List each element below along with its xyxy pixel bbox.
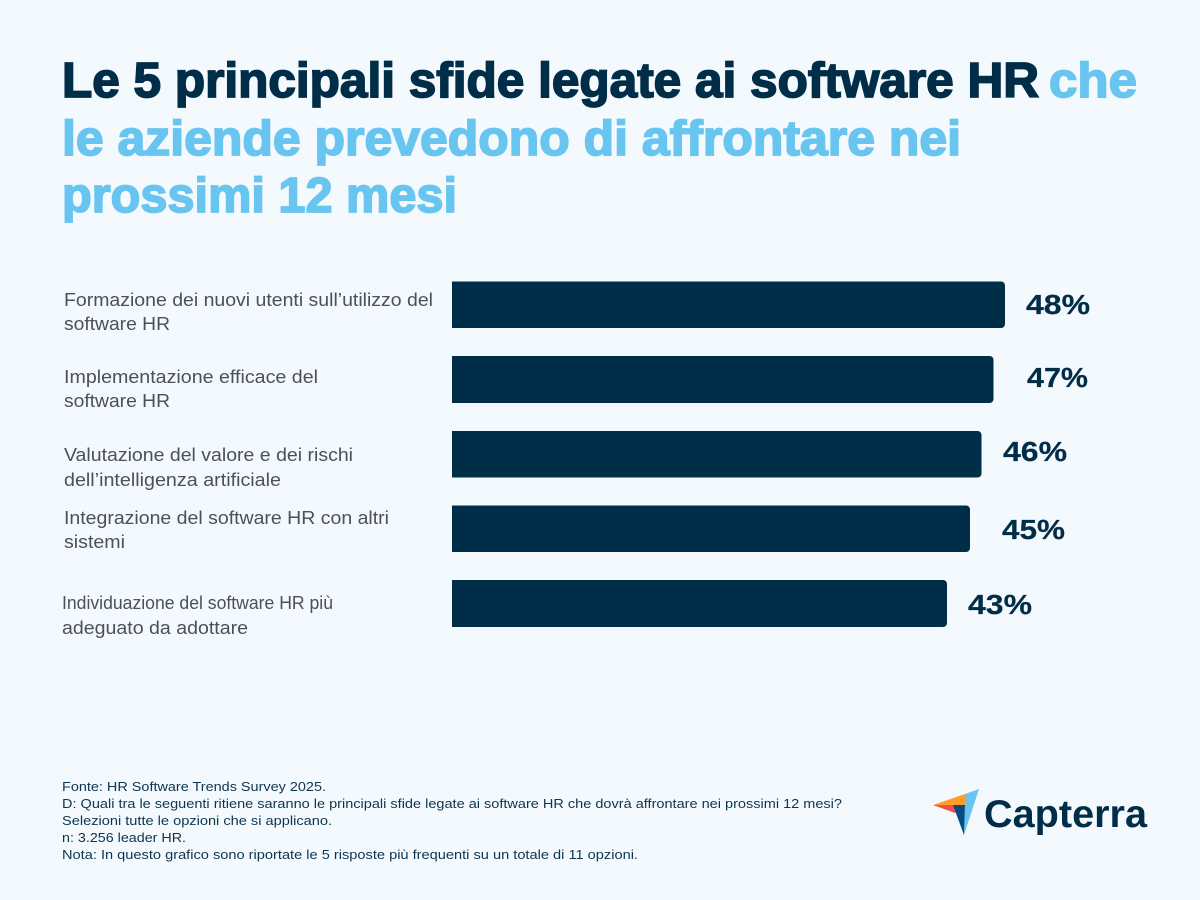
row 4: Integrazione 45%: [64, 506, 1065, 552]
icon: Capterra arrow: [933, 789, 979, 835]
row 2: Implementazione 47%: software HR: [64, 391, 170, 411]
source notes: Fonte: HR Software Trends Survey 2025.: [62, 779, 326, 794]
row 4: Integrazione 45%: 45%: [1002, 514, 1065, 545]
row 2: Implementazione 47%: Implementazione efficace del: [64, 367, 318, 387]
row 3: Valutazione 46%: [64, 431, 1067, 490]
logo: Capterra: [933, 789, 1147, 836]
row 3: Valutazione 46%: dell’intelligenza artificiale: [64, 470, 281, 490]
row 5: Individuazione 43%: [62, 580, 1032, 638]
row 1: Formazione 48%: 48%: [1026, 289, 1090, 320]
title: le aziende prevedono di affrontare nei: [62, 112, 961, 166]
row 1: Formazione 48%: software HR: [64, 314, 170, 334]
row 4: Integrazione 45%: sistemi: [64, 532, 125, 552]
row 2: Implementazione 47%: 47%: [1027, 362, 1088, 393]
title: Le 5 principali sfide legate ai software HR: [62, 54, 1039, 108]
row 4: Integrazione 45%: Integrazione del software HR con altri: [64, 508, 389, 528]
row 5: Individuazione 43%: 43%: [968, 589, 1032, 620]
source notes: Selezioni tutte le opzioni che si applicano.: [62, 813, 332, 828]
row 1: Formazione 48%: Formazione dei nuovi utenti sull’utilizzo del: [64, 290, 433, 310]
bar chart: [62, 282, 1090, 638]
row 1: Formazione 48%: [64, 282, 1090, 334]
title: [62, 54, 1137, 223]
row 3: Valutazione 46%: 46%: [1003, 436, 1067, 467]
row 3: Valutazione 46%: Valutazione del valore e dei rischi: [64, 445, 353, 465]
source notes: [62, 779, 842, 862]
logo: Capterra: Capterra: [984, 793, 1147, 836]
row 5: Individuazione 43%: Individuazione del software HR più: [62, 593, 333, 613]
row 5: Individuazione 43%: adeguato da adottare: [62, 618, 248, 638]
source notes: n: 3.256 leader HR.: [62, 830, 186, 845]
title: che: [1049, 54, 1137, 108]
source notes: Nota: In questo grafico sono riportate le 5 risposte più frequenti su un totale di 11 opzioni.: [62, 847, 638, 862]
title: prossimi 12 mesi: [62, 169, 457, 223]
source notes: D: Quali tra le seguenti ritiene saranno le principali sfide legate ai software HR che dovrà affrontare nei prossimi 12 mesi?: [62, 796, 842, 811]
row 2: Implementazione 47%: [64, 356, 1088, 411]
